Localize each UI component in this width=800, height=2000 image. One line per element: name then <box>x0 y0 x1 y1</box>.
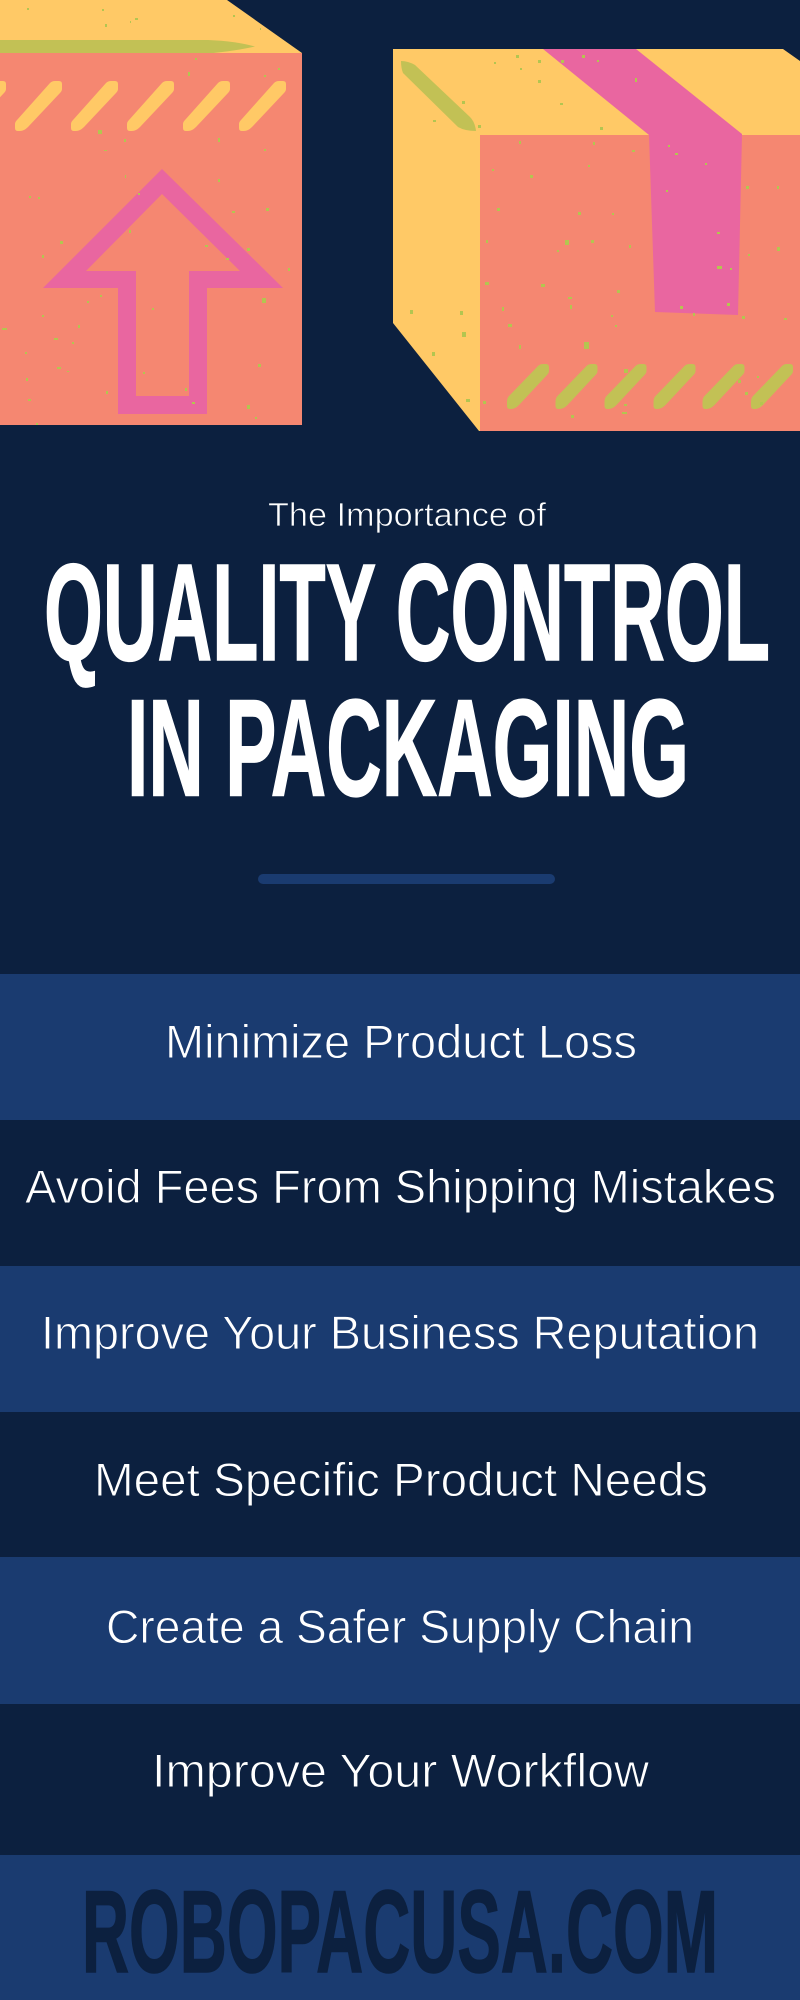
list row 3 <box>0 1266 800 1412</box>
illustration: right package box with pink tape <box>393 49 800 431</box>
box front face <box>0 53 302 425</box>
row 5 text: Create a Safer Supply Chain <box>106 1600 694 1653</box>
green diagonal tape <box>401 61 476 131</box>
box front face <box>480 135 800 431</box>
list row 6 <box>0 1704 800 1855</box>
list row 5 <box>0 1557 800 1704</box>
illustration: left package box with up arrow <box>0 0 302 425</box>
row 4 text: Meet Specific Product Needs <box>94 1453 708 1506</box>
green tape on flap <box>0 40 255 54</box>
speckles <box>2 58 290 425</box>
list row 1 <box>0 974 800 1120</box>
box top flap <box>0 0 302 53</box>
box side and top faces <box>393 49 800 431</box>
subtitle: The Importance of <box>268 496 547 533</box>
row 3 text: Improve Your Business Reputation <box>41 1306 759 1359</box>
list row 4 <box>0 1412 800 1557</box>
green hatch stripes <box>507 364 793 409</box>
row 1 text: Minimize Product Loss <box>165 1015 637 1068</box>
yellow hatch stripes <box>0 81 286 131</box>
pink outlined up arrow <box>43 169 283 414</box>
row 6 text: Improve Your Workflow <box>152 1744 650 1797</box>
divider bar <box>258 874 555 884</box>
speckles <box>410 55 787 418</box>
list row 2 <box>0 1120 800 1266</box>
main title <box>44 536 770 826</box>
pink tape <box>543 49 742 315</box>
row 2 text: Avoid Fees From Shipping Mistakes <box>25 1160 776 1213</box>
footer band <box>0 1855 800 2000</box>
